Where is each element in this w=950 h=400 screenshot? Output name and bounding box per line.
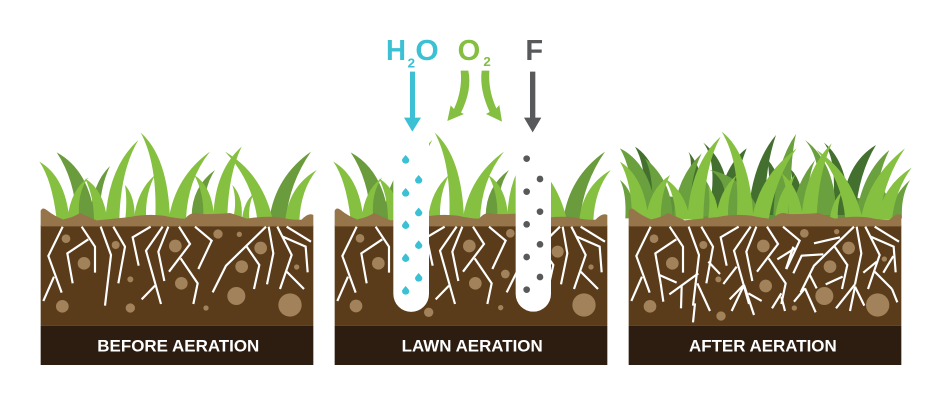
roots: before aeration bbox=[43, 227, 311, 306]
soil stones: lawn aeration bbox=[350, 229, 596, 317]
F heading: F bbox=[525, 35, 543, 67]
aeration hole: water bbox=[393, 120, 429, 312]
roots: after aeration bbox=[631, 227, 899, 322]
soil stones: after aeration bbox=[644, 229, 889, 321]
soil: lawn aeration bbox=[335, 208, 607, 365]
H2O heading O: O bbox=[415, 35, 439, 67]
arrow: oxygen left bbox=[447, 71, 469, 121]
grass: after aeration bbox=[620, 132, 912, 219]
grass: lawn aeration bbox=[333, 133, 611, 221]
panel: before aeration bbox=[39, 133, 317, 365]
arrow: fertilizer bbox=[524, 72, 541, 132]
fertilizer granules bbox=[523, 155, 543, 293]
aeration hole: fertilizer bbox=[516, 120, 551, 312]
inputs above hole bbox=[386, 35, 543, 295]
roots: lawn aeration bbox=[337, 227, 605, 306]
label: after aeration: AFTER AERATION bbox=[689, 338, 837, 356]
panel: after aeration bbox=[620, 132, 912, 365]
O2 subscript: 2 bbox=[483, 54, 491, 69]
H2O heading: H bbox=[386, 35, 406, 67]
label: lawn aeration: LAWN AERATION bbox=[402, 338, 543, 356]
soil: before aeration bbox=[41, 208, 313, 365]
arrow: water bbox=[404, 72, 421, 132]
H2O subscript: 2 bbox=[408, 55, 415, 70]
water droplets bbox=[402, 155, 422, 295]
soil: after aeration bbox=[629, 208, 901, 365]
panel: lawn aeration bbox=[333, 120, 611, 365]
grass: before aeration bbox=[39, 133, 317, 221]
O2 heading: O bbox=[458, 35, 480, 67]
arrow: oxygen right bbox=[481, 71, 502, 122]
label: before aeration: BEFORE AERATION bbox=[97, 338, 259, 356]
soil stones: before aeration bbox=[56, 229, 302, 317]
